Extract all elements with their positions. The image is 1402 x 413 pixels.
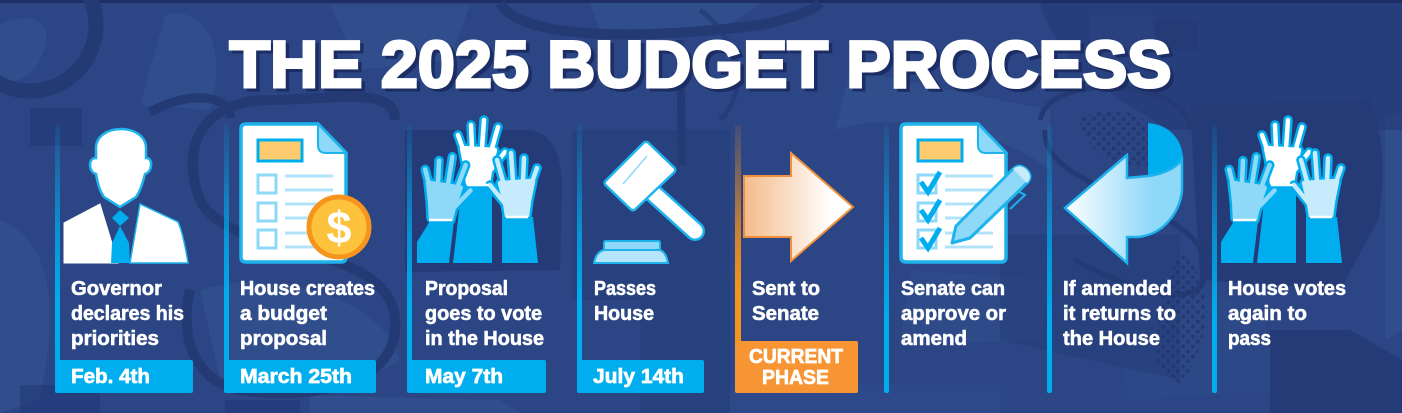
step text: House votes — [1228, 278, 1346, 300]
icon: document with coin: $ — [326, 202, 352, 253]
step text: Sent to — [752, 278, 820, 300]
step text: Governor — [71, 278, 162, 300]
step 5: sent to senate, current phase — [735, 125, 858, 393]
icon: gavel — [594, 145, 695, 263]
step 4: passes house — [577, 125, 704, 393]
step text: priorities — [71, 328, 159, 350]
current phase tag: CURRENT — [749, 345, 843, 368]
step 7: returns to the house — [1047, 123, 1183, 393]
timeline bar — [407, 125, 412, 365]
icon: return arrow — [1065, 123, 1183, 263]
step text: again to — [1228, 303, 1307, 325]
step 3: house vote — [407, 120, 546, 393]
date bar — [55, 360, 193, 393]
timeline bar — [1047, 125, 1052, 393]
timeline bar — [55, 125, 60, 365]
step text: declares his — [71, 303, 184, 325]
date bar: Feb. 4th — [71, 365, 150, 388]
date bar: March 25th — [240, 365, 352, 388]
step text — [594, 278, 656, 325]
step text: Passes — [594, 278, 656, 300]
timeline bar — [884, 125, 889, 393]
step text — [425, 278, 544, 350]
timeline bar — [577, 125, 582, 365]
step 2: house budget proposal — [224, 124, 376, 393]
title: THE 2025 BUDGET PROCESS — [233, 30, 1175, 104]
date bar — [407, 360, 546, 393]
date bar: May 7th — [425, 365, 503, 388]
step text: House — [594, 303, 654, 325]
step text: the House — [1063, 328, 1160, 350]
date bar — [577, 360, 704, 393]
step text: House creates — [240, 278, 375, 300]
step text: in the House — [425, 328, 544, 350]
step text: If amended — [1063, 278, 1172, 300]
step text — [901, 278, 1006, 350]
step text: pass — [1228, 328, 1271, 350]
icon: raised hands — [417, 120, 538, 263]
timeline bar — [1212, 125, 1217, 393]
step text — [1228, 278, 1346, 350]
step text: Senate can — [901, 278, 1005, 300]
step text — [752, 278, 820, 325]
step text — [71, 278, 184, 350]
icon: checklist and pen — [901, 124, 1030, 262]
icon: document with coin — [241, 124, 369, 262]
step text: it returns to — [1063, 303, 1176, 325]
step text: approve or — [901, 303, 1006, 325]
timeline bar — [224, 125, 229, 365]
step text — [240, 278, 375, 350]
step text: amend — [901, 328, 967, 350]
step 8: house votes again — [1212, 120, 1346, 393]
step text: Proposal — [425, 278, 508, 300]
step 1: governor — [55, 125, 193, 393]
step text: proposal — [240, 328, 327, 350]
step text — [1063, 278, 1176, 350]
step text: goes to vote — [425, 303, 542, 325]
current phase tag — [735, 341, 858, 393]
icon: raised hands — [1221, 120, 1342, 263]
date bar — [224, 360, 376, 393]
step 6: senate approves or amends — [884, 124, 1030, 393]
step text: a budget — [240, 303, 327, 325]
step text: Senate — [752, 303, 819, 325]
title: THE 2025 BUDGET PROCESS — [230, 27, 1172, 101]
icon: orange arrow — [744, 153, 853, 261]
date bar: July 14th — [593, 365, 684, 388]
icon: governor silhouette — [64, 129, 188, 263]
timeline bar — [735, 125, 741, 345]
current phase tag: PHASE — [762, 366, 829, 389]
